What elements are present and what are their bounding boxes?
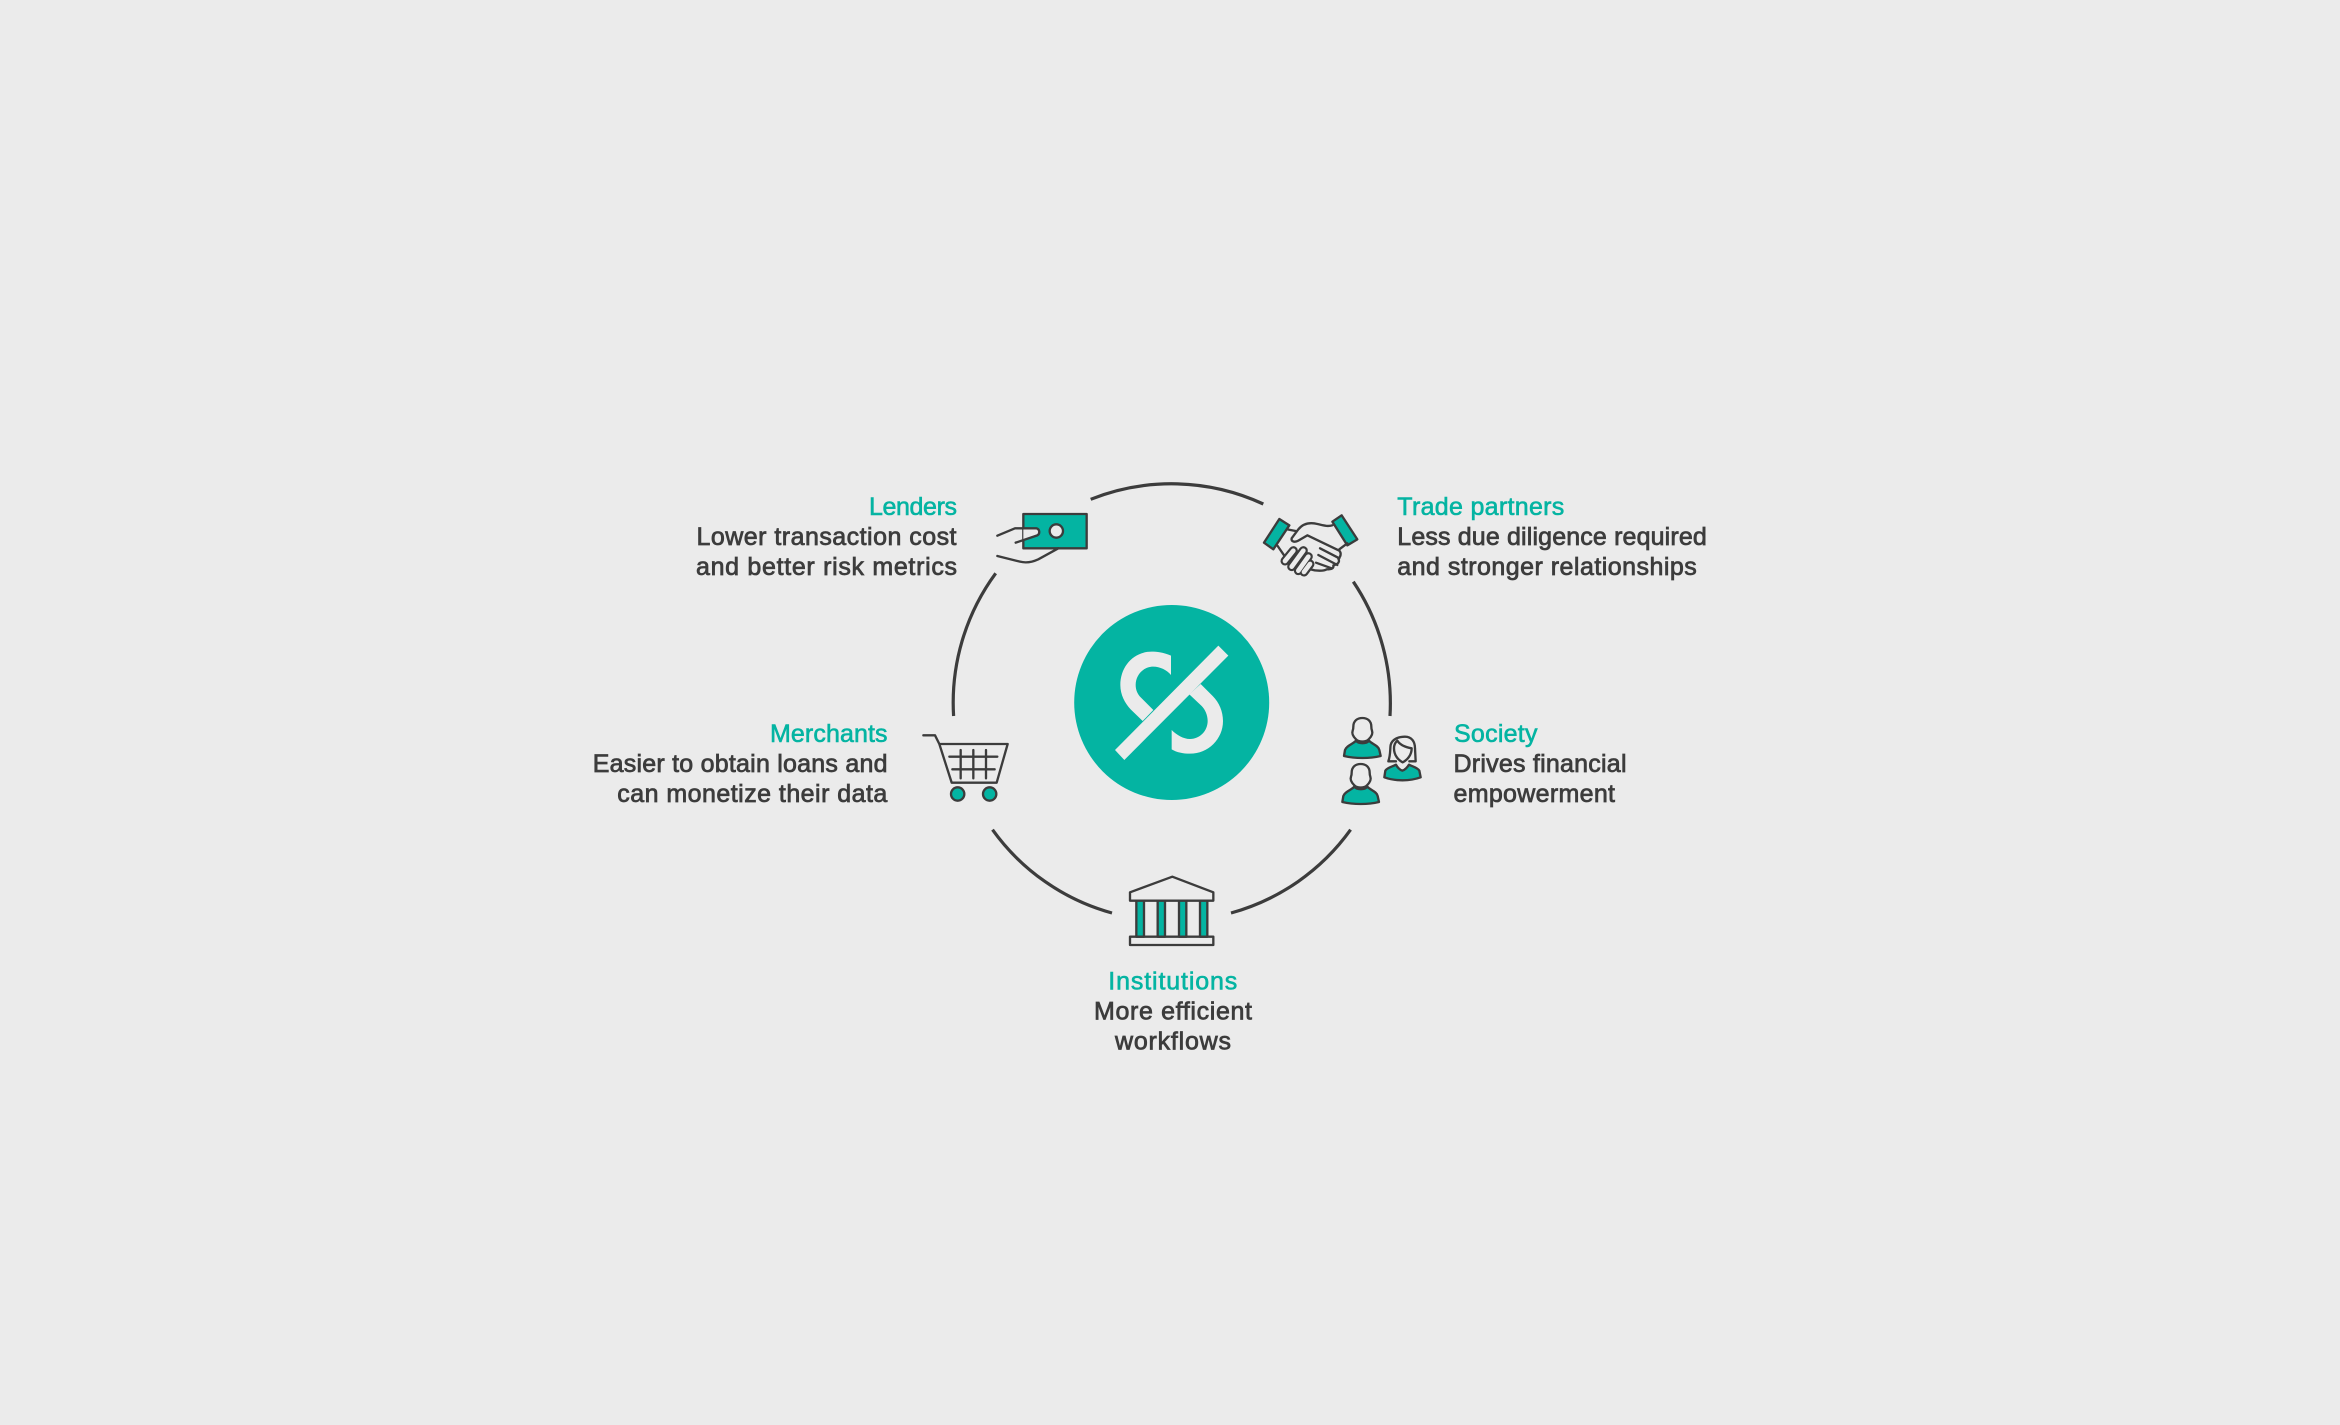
person one [1344, 718, 1381, 758]
text block: institutions: Institutions [1108, 968, 1237, 996]
icon: handshake [1264, 515, 1357, 572]
text block: institutions [1094, 968, 1252, 1056]
ring of connecting arcs [953, 484, 1390, 913]
text block: lenders: Lenders [869, 493, 957, 521]
text block: trade partners [1397, 493, 1707, 581]
text block: trade partners: and stronger relationships [1397, 553, 1697, 581]
text block: merchants: can monetize their data [617, 780, 887, 808]
icon: hand holding money [997, 514, 1087, 562]
icon: institution building [1130, 877, 1213, 945]
text block: merchants: Easier to obtain loans and [593, 750, 888, 778]
text block: merchants: Merchants [770, 720, 888, 748]
text block: society: Drives financial [1454, 750, 1626, 778]
text block: society: empowerment [1454, 780, 1615, 808]
icon: society people [1342, 718, 1421, 804]
text block: trade partners: Less due diligence required [1397, 523, 1707, 551]
text block: lenders: Lower transaction cost [696, 523, 957, 551]
person two [1342, 764, 1379, 804]
text block: institutions: workflows [1114, 1028, 1231, 1056]
text block: institutions: More efficient [1094, 998, 1252, 1026]
text block: society: Society [1454, 720, 1538, 748]
text block: trade partners: Trade partners [1397, 493, 1564, 521]
text block: lenders [696, 493, 957, 581]
person three [1384, 737, 1421, 780]
text block: society [1454, 720, 1626, 808]
central logo badge [1074, 605, 1269, 800]
icon: shopping cart [923, 735, 1008, 801]
text block: lenders: and better risk metrics [696, 553, 957, 581]
text block: merchants [593, 720, 888, 808]
